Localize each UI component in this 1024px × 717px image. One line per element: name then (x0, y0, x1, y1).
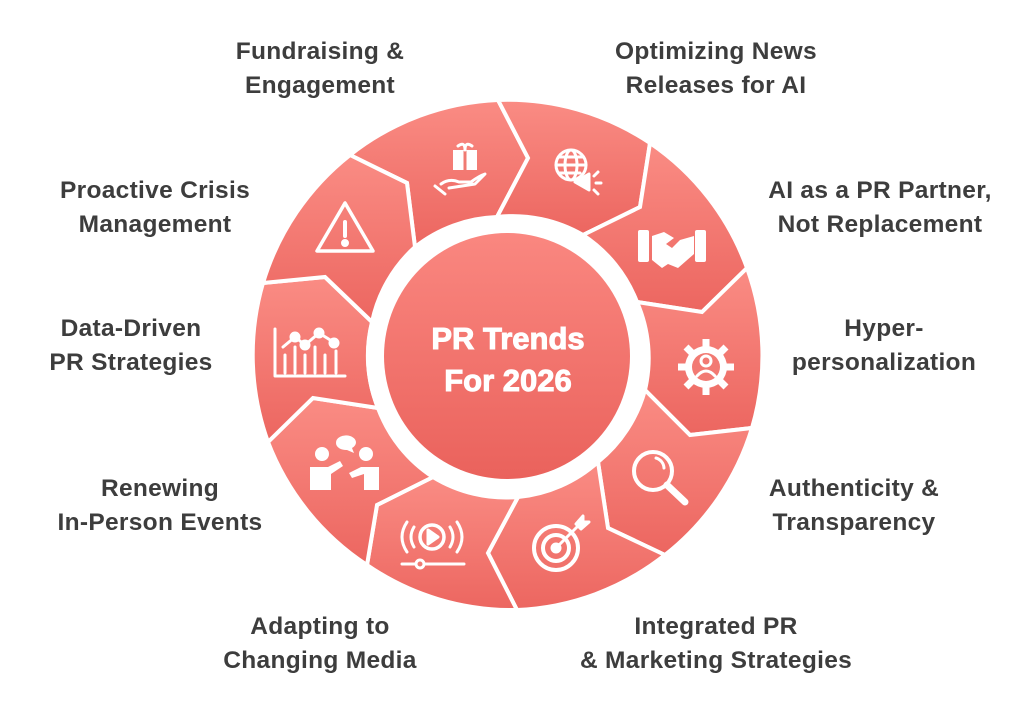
icon: play media (402, 522, 464, 568)
label: integrated: Integrated PR (634, 613, 798, 640)
label: adapting media (223, 613, 417, 674)
label: fundraising: Fundraising & (236, 38, 404, 65)
icon: handshake (638, 230, 706, 268)
label: integrated: & Marketing Strategies (580, 647, 852, 674)
label: AI partner: Not Replacement (778, 211, 982, 238)
segment: data-driven (253, 277, 378, 442)
label: optimizing news (615, 38, 817, 99)
label: adapting media: Changing Media (223, 647, 417, 674)
label: crisis: Proactive Crisis (60, 177, 250, 204)
label: renewing events (58, 475, 262, 536)
icon: people talking (310, 435, 379, 490)
icon: globe megaphone (556, 150, 601, 194)
label: AI partner (768, 177, 992, 238)
center circle (384, 233, 630, 479)
label: hyper-personalization: personalization (792, 349, 976, 376)
icon: target (534, 516, 589, 570)
segment: crisis (263, 155, 415, 322)
segment: renewing events (268, 398, 433, 565)
label: authenticity: Transparency (773, 509, 935, 536)
label: fundraising: Engagement (245, 72, 395, 99)
segment: hyper-personalization (637, 268, 762, 435)
center circle: For 2026 (444, 363, 572, 398)
label: data-driven: Data-Driven (61, 315, 201, 342)
icon: gear person (678, 339, 734, 395)
segment: fundraising (350, 100, 528, 247)
icon: warning (317, 203, 373, 251)
label: data-driven: PR Strategies (49, 349, 213, 376)
segment: integrated (488, 462, 665, 610)
label: fundraising (236, 38, 404, 99)
label: crisis (60, 177, 250, 238)
segment: adapting media (367, 477, 518, 610)
label: optimizing news: Releases for AI (626, 72, 806, 99)
label: optimizing news: Optimizing News (615, 38, 817, 65)
label: integrated (580, 613, 852, 674)
label: renewing events: In-Person Events (58, 509, 262, 536)
segment: optimizing news (497, 100, 650, 235)
center circle: PR Trends (431, 321, 585, 356)
segment: AI partner (583, 143, 747, 312)
icon: magnifier (634, 452, 685, 502)
label: AI partner: AI as a PR Partner, (768, 177, 992, 204)
label: renewing events: Renewing (101, 475, 219, 502)
label: hyper-personalization: Hyper- (844, 315, 924, 342)
icon: chart (275, 329, 345, 376)
label: authenticity (769, 475, 939, 536)
segment: authenticity (598, 390, 752, 555)
label: authenticity: Authenticity & (769, 475, 939, 502)
label: data-driven (49, 315, 213, 376)
label: adapting media: Adapting to (250, 613, 390, 640)
icon: gift hand (435, 144, 485, 194)
label: hyper-personalization (792, 315, 976, 376)
label: crisis: Management (79, 211, 231, 238)
